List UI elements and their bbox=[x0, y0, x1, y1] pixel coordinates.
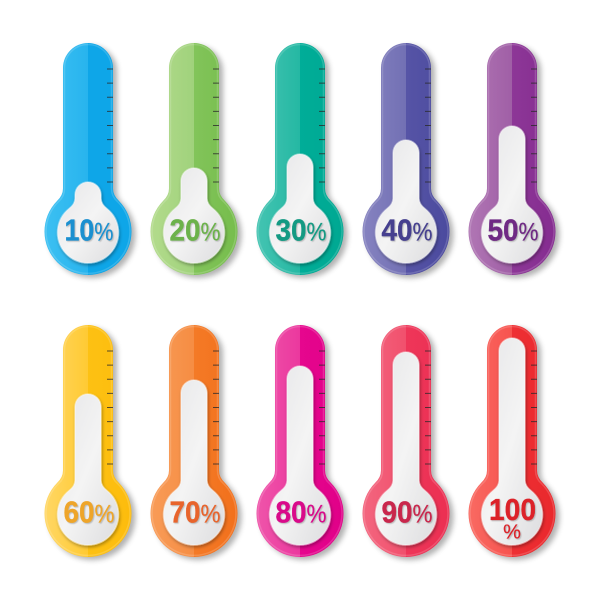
value label: % bbox=[503, 522, 521, 544]
mercury level bbox=[164, 380, 224, 545]
mercury level bbox=[270, 154, 330, 263]
value label bbox=[489, 492, 536, 544]
thermometer body bbox=[150, 43, 238, 275]
scale ticks bbox=[319, 351, 325, 464]
thermometer body bbox=[468, 325, 556, 557]
scale ticks bbox=[107, 69, 113, 182]
thermometer body bbox=[468, 43, 556, 275]
value label: 80% bbox=[276, 494, 326, 530]
thermometer 10% bbox=[44, 43, 136, 278]
mercury level bbox=[164, 168, 224, 263]
thermometer 40% bbox=[362, 43, 454, 278]
mercury level bbox=[482, 126, 542, 263]
mercury level bbox=[58, 394, 118, 545]
value label: 50% bbox=[488, 212, 538, 248]
mercury level bbox=[58, 182, 118, 263]
thermometer body bbox=[256, 325, 344, 557]
thermometer 70% bbox=[150, 325, 242, 560]
value label: 70% bbox=[170, 494, 220, 530]
scale ticks bbox=[213, 351, 219, 464]
value label: 20% bbox=[170, 212, 220, 248]
thermometer body bbox=[362, 43, 450, 275]
thermometer 80% bbox=[256, 325, 348, 560]
scale ticks bbox=[531, 351, 537, 464]
value label: 100 bbox=[489, 492, 536, 527]
thermometer body bbox=[44, 325, 132, 557]
value label: 30% bbox=[276, 212, 326, 248]
scale ticks bbox=[107, 351, 113, 464]
thermometer 50% bbox=[468, 43, 560, 278]
scale ticks bbox=[425, 69, 431, 182]
value label: 90% bbox=[382, 494, 432, 530]
scale ticks bbox=[319, 69, 325, 182]
scale ticks bbox=[213, 69, 219, 182]
value label: 10% bbox=[64, 212, 114, 248]
mercury level bbox=[376, 140, 436, 263]
mercury level bbox=[482, 338, 542, 545]
thermometer 30% bbox=[256, 43, 348, 278]
thermometer body bbox=[150, 325, 238, 557]
mercury level bbox=[270, 366, 330, 545]
scale ticks bbox=[425, 351, 431, 464]
mercury level bbox=[376, 352, 436, 545]
thermometer 20% bbox=[150, 43, 242, 278]
thermometer body bbox=[362, 325, 450, 557]
thermometer body bbox=[44, 43, 132, 275]
value label: 60% bbox=[64, 494, 114, 530]
scale ticks bbox=[531, 69, 537, 182]
thermometer 100% bbox=[468, 325, 560, 560]
thermometer 90% bbox=[362, 325, 454, 560]
thermometer 60% bbox=[44, 325, 136, 560]
value label: 40% bbox=[382, 212, 432, 248]
thermometer body bbox=[256, 43, 344, 275]
